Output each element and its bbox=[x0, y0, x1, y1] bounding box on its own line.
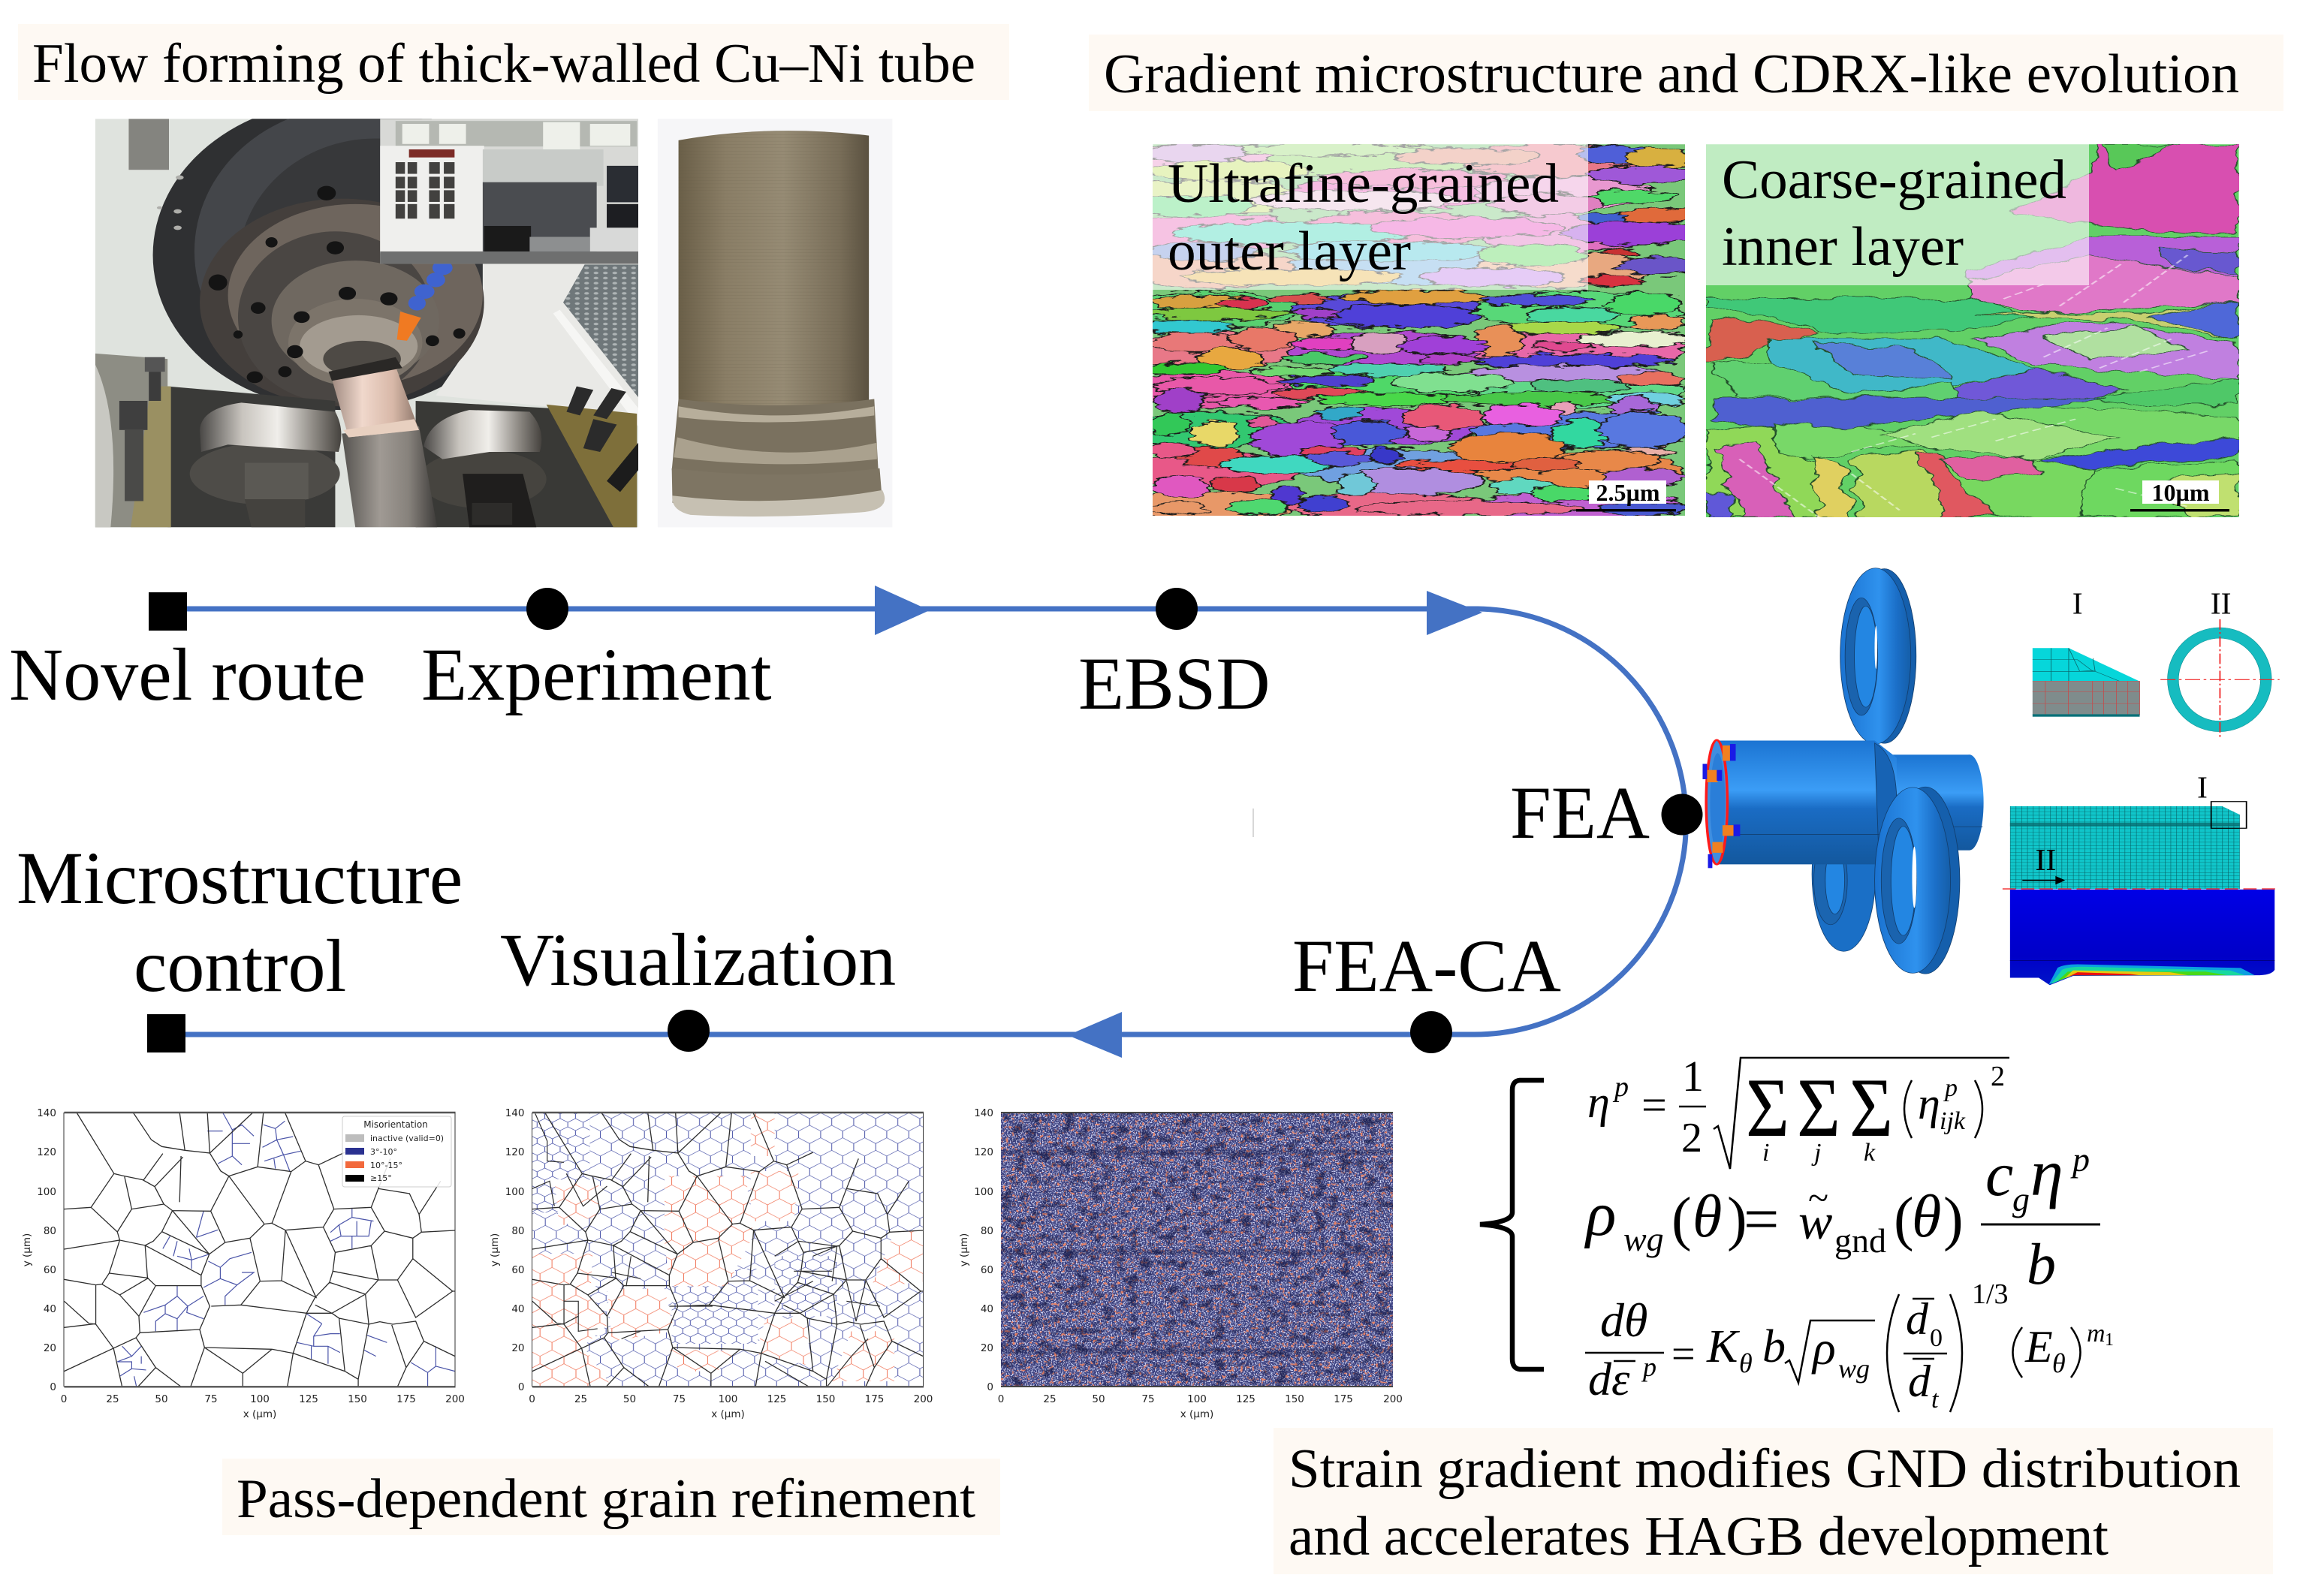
label: I zoom box bbox=[2197, 770, 2247, 828]
marker: novel route start square bbox=[149, 592, 187, 631]
equation 1 bbox=[1587, 1052, 2009, 1169]
axis labels: 25 bbox=[106, 1393, 119, 1405]
axis labels: 150 bbox=[1285, 1393, 1304, 1405]
axis labels: 125 bbox=[299, 1393, 318, 1405]
label: experiment: Experiment bbox=[421, 633, 772, 716]
EBSD map: ultrafine-grained outer layer: outer layer bbox=[1168, 221, 1411, 282]
equation 2: ( bbox=[1894, 1186, 1914, 1252]
plot 1: misorientation map, early pass bbox=[21, 1107, 465, 1420]
axis labels: 120 bbox=[974, 1146, 993, 1158]
legend: 3°-10° bbox=[370, 1147, 397, 1157]
equation 3: = bbox=[1671, 1331, 1696, 1378]
roller: front bbox=[1875, 787, 1960, 974]
axis labels: 140 bbox=[505, 1107, 524, 1119]
equation 2: b bbox=[2027, 1231, 2056, 1296]
label: I: I bbox=[2072, 587, 2083, 622]
equation 1: η bbox=[1918, 1079, 1940, 1128]
legend bbox=[342, 1116, 451, 1187]
axis labels: 80 bbox=[44, 1225, 56, 1237]
equation 3: wg bbox=[1838, 1354, 1870, 1384]
axis labels: 125 bbox=[1236, 1393, 1255, 1405]
brace bbox=[1480, 1080, 1544, 1369]
mandrel bbox=[1883, 754, 1984, 851]
faint mark bbox=[1252, 809, 1254, 837]
axis labels: 80 bbox=[981, 1225, 993, 1237]
label: FEA: FEA bbox=[1510, 771, 1650, 854]
equation 3: d bbox=[1906, 1294, 1929, 1344]
heading: strain gradient conclusion: and accelerates HAGB development bbox=[1289, 1506, 2109, 1567]
equation 3: 1/3 bbox=[1972, 1278, 2009, 1310]
equation 1: η bbox=[1587, 1077, 1610, 1127]
equation 1: = bbox=[1641, 1080, 1667, 1130]
contour plot bbox=[2003, 889, 2280, 985]
label: I zoom box: I bbox=[2197, 770, 2208, 805]
axis labels: 175 bbox=[396, 1393, 416, 1405]
equation 3: p bbox=[1641, 1352, 1656, 1382]
equation 2: p bbox=[2070, 1140, 2090, 1179]
EBSD map: coarse-grained inner layer: inner layer bbox=[1722, 216, 1964, 278]
FEA model: tube and rollers bbox=[1702, 568, 2280, 985]
photo: flow forming machine bbox=[95, 100, 638, 527]
axis labels: 20 bbox=[511, 1342, 524, 1354]
marker: visualization dot bbox=[668, 1010, 710, 1052]
axis labels: 175 bbox=[865, 1393, 884, 1405]
medium-angle cell network bbox=[532, 1113, 924, 1387]
arrow: route direction 2 bbox=[1427, 591, 1482, 635]
photo: flow-formed tube bbox=[658, 119, 892, 527]
axis labels: 0 bbox=[998, 1393, 1004, 1405]
equation 2: ) bbox=[1727, 1186, 1747, 1252]
equation 2: wg bbox=[1623, 1220, 1664, 1258]
axis labels: 80 bbox=[511, 1225, 524, 1237]
low-angle cell network bbox=[532, 1113, 924, 1387]
axis labels: 150 bbox=[348, 1393, 367, 1405]
equation 1: 2 bbox=[1681, 1115, 1702, 1161]
label: microstructure control: control bbox=[134, 924, 346, 1007]
equation 1: i bbox=[1762, 1139, 1769, 1167]
equation 2: = bbox=[1744, 1185, 1779, 1254]
label: microstructure control bbox=[17, 836, 463, 1007]
detail II ring section bbox=[2160, 619, 2280, 739]
equation 3: d bbox=[1908, 1357, 1931, 1406]
equation 3: dθ bbox=[1600, 1293, 1647, 1347]
boundary condition ring bbox=[1702, 740, 1740, 868]
axis labels: 0 bbox=[987, 1381, 993, 1393]
label: II: II bbox=[2211, 587, 2231, 622]
dense grain field bbox=[1001, 1113, 1393, 1387]
axis labels: 140 bbox=[974, 1107, 993, 1119]
axis labels: y (µm) bbox=[489, 1233, 501, 1266]
axis labels: 40 bbox=[44, 1303, 56, 1315]
marker: microstructure control end square bbox=[147, 1014, 185, 1052]
equation 2: c bbox=[1985, 1140, 2013, 1209]
equation 2 bbox=[1584, 1137, 2100, 1296]
axis labels: 25 bbox=[1043, 1393, 1057, 1405]
axis labels: y (µm) bbox=[21, 1233, 33, 1266]
equation 1: Σ bbox=[1849, 1061, 1893, 1155]
label: microstructure control: Microstructure bbox=[17, 836, 463, 920]
arrow: route direction 3 bbox=[1068, 1012, 1122, 1058]
axis labels: x (µm) bbox=[711, 1408, 745, 1420]
axis labels: 120 bbox=[505, 1146, 524, 1158]
equation 1: Σ bbox=[1746, 1061, 1789, 1155]
equation 3: 1 bbox=[2105, 1330, 2114, 1350]
legend: inactive (valid=0) bbox=[370, 1134, 444, 1143]
EBSD map: coarse-grained inner layer: 10µm bbox=[2151, 479, 2210, 506]
axis labels: 40 bbox=[981, 1303, 993, 1315]
equation 3: dε bbox=[1588, 1354, 1630, 1405]
label: EBSD: EBSD bbox=[1078, 642, 1271, 725]
section mesh bbox=[2010, 806, 2240, 889]
label: II arrow: II bbox=[2036, 843, 2056, 878]
equation 1: p bbox=[1612, 1071, 1629, 1103]
axis labels: 100 bbox=[719, 1393, 737, 1405]
axis labels: 120 bbox=[37, 1146, 56, 1158]
flow route: curved blue line bbox=[166, 609, 1686, 1034]
label: visualization: Visualization bbox=[500, 918, 896, 1001]
axis labels: 60 bbox=[511, 1264, 524, 1276]
equation 3: K bbox=[1706, 1321, 1741, 1372]
axis labels: 175 bbox=[1334, 1393, 1353, 1405]
label: FEA-CA: FEA-CA bbox=[1292, 924, 1561, 1007]
equation 2: η bbox=[2030, 1137, 2063, 1210]
equation 3: t bbox=[1931, 1386, 1940, 1414]
axis labels: 100 bbox=[1187, 1393, 1207, 1405]
equation 1: Σ bbox=[1797, 1061, 1840, 1155]
arrow: route direction 1 bbox=[875, 586, 930, 635]
low-angle boundaries bbox=[117, 1113, 455, 1387]
equation 3 bbox=[1585, 1278, 2114, 1414]
label: novel route: Novel route bbox=[9, 633, 366, 716]
equation 2: ) bbox=[1943, 1186, 1964, 1252]
equation 1: 2 bbox=[1991, 1061, 2005, 1092]
EBSD map: ultrafine-grained outer layer bbox=[1153, 144, 1685, 516]
axis labels: 40 bbox=[511, 1303, 524, 1315]
axis labels: 100 bbox=[505, 1186, 524, 1198]
axis labels: y (µm) bbox=[958, 1233, 970, 1266]
axis labels: 200 bbox=[1383, 1393, 1403, 1405]
axis labels: 60 bbox=[44, 1264, 56, 1276]
axis labels: 100 bbox=[974, 1186, 993, 1198]
axis labels: 75 bbox=[204, 1393, 218, 1405]
axis labels: 0 bbox=[529, 1393, 535, 1405]
tube body bbox=[1706, 740, 1897, 864]
marker: FEA dot bbox=[1661, 794, 1703, 835]
axis labels: 140 bbox=[37, 1107, 56, 1119]
equation 2: ~ bbox=[1808, 1176, 1828, 1218]
plot frame bbox=[64, 1113, 456, 1387]
equation 3: b bbox=[1762, 1321, 1786, 1372]
high-angle boundaries bbox=[64, 1113, 455, 1387]
axis labels: 50 bbox=[623, 1393, 636, 1405]
legend: ≥15° bbox=[370, 1173, 392, 1183]
axis labels: 50 bbox=[1092, 1393, 1105, 1405]
axis labels: 100 bbox=[37, 1186, 56, 1198]
equation 3: E bbox=[2024, 1322, 2053, 1372]
heading: strain gradient conclusion bbox=[1274, 1428, 2273, 1574]
equation 2: θ bbox=[1912, 1184, 1941, 1250]
equation 1: j bbox=[1811, 1139, 1821, 1167]
equation 3: ρ bbox=[1811, 1321, 1836, 1375]
axis labels: 100 bbox=[250, 1393, 270, 1405]
roller: lower back bbox=[1812, 797, 1876, 951]
axis labels: x (µm) bbox=[1180, 1408, 1213, 1420]
axis labels: 75 bbox=[673, 1393, 686, 1405]
axis labels bbox=[958, 1107, 1403, 1420]
axis labels bbox=[489, 1107, 933, 1420]
axis labels: 125 bbox=[767, 1393, 786, 1405]
axis labels: 50 bbox=[155, 1393, 168, 1405]
axis labels: 20 bbox=[44, 1342, 56, 1354]
heading: flow forming: Flow forming of thick-walled Cu–Ni tube bbox=[32, 33, 975, 95]
marker: EBSD dot bbox=[1156, 588, 1198, 630]
axis labels: 75 bbox=[1141, 1393, 1155, 1405]
axis labels: 25 bbox=[574, 1393, 587, 1405]
roller: top bbox=[1840, 568, 1916, 744]
plot 2: misorientation map, middle pass bbox=[489, 1107, 933, 1420]
axis labels: 60 bbox=[981, 1264, 993, 1276]
equation 2: w bbox=[1798, 1193, 1832, 1250]
equation 3: θ bbox=[2052, 1348, 2066, 1378]
EBSD map: coarse-grained inner layer: Coarse-grained bbox=[1722, 149, 2066, 211]
heading: pass-dependent grain refinement: Pass-dependent grain refinement bbox=[237, 1468, 975, 1530]
axis labels: 0 bbox=[518, 1381, 524, 1393]
equation 2: g bbox=[2012, 1180, 2030, 1218]
axis labels: 20 bbox=[981, 1342, 993, 1354]
equation 2: ρ bbox=[1584, 1179, 1616, 1249]
EBSD map: ultrafine-grained outer layer: Ultrafine-grained bbox=[1168, 153, 1559, 215]
EBSD map: ultrafine-grained outer layer: 2.5µm bbox=[1596, 479, 1660, 506]
equation 3: 0 bbox=[1930, 1324, 1943, 1352]
axis labels bbox=[21, 1107, 465, 1420]
legend: Misorientation bbox=[363, 1119, 428, 1130]
equation 1: p bbox=[1943, 1074, 1958, 1102]
legend: 10°-15° bbox=[370, 1161, 402, 1170]
axis labels: 0 bbox=[61, 1393, 67, 1405]
axis labels: 200 bbox=[914, 1393, 933, 1405]
equation 2: gnd bbox=[1834, 1221, 1886, 1260]
extra high-angle boundaries bbox=[532, 1113, 880, 1387]
marker: FEA-CA dot bbox=[1410, 1011, 1452, 1053]
equation 1: ijk bbox=[1940, 1107, 1966, 1135]
axis labels: x (µm) bbox=[243, 1408, 276, 1420]
heading: strain gradient conclusion: Strain gradient modifies GND distribution bbox=[1289, 1438, 2241, 1500]
axis labels: 200 bbox=[445, 1393, 465, 1405]
label: II arrow bbox=[2022, 843, 2065, 884]
high-angle boundaries bbox=[532, 1113, 923, 1387]
plot 3: misorientation map, late pass bbox=[958, 1107, 1403, 1420]
equation 2: θ bbox=[1693, 1184, 1722, 1250]
marker: experiment dot bbox=[526, 588, 568, 630]
plot frame bbox=[532, 1113, 924, 1387]
axis labels: 150 bbox=[816, 1393, 835, 1405]
axis labels: 0 bbox=[50, 1381, 56, 1393]
heading: gradient microstructure: Gradient microstructure and CDRX-like evolution bbox=[1104, 44, 2239, 105]
equation 3: m bbox=[2087, 1320, 2106, 1348]
equation 2: ( bbox=[1671, 1186, 1692, 1252]
equation 1: 1 bbox=[1682, 1052, 1704, 1101]
equation 1: k bbox=[1864, 1139, 1876, 1167]
detail I mesh bbox=[2033, 648, 2140, 717]
equation 3: θ bbox=[1739, 1348, 1753, 1378]
EBSD map: coarse-grained inner layer bbox=[1706, 140, 2238, 517]
